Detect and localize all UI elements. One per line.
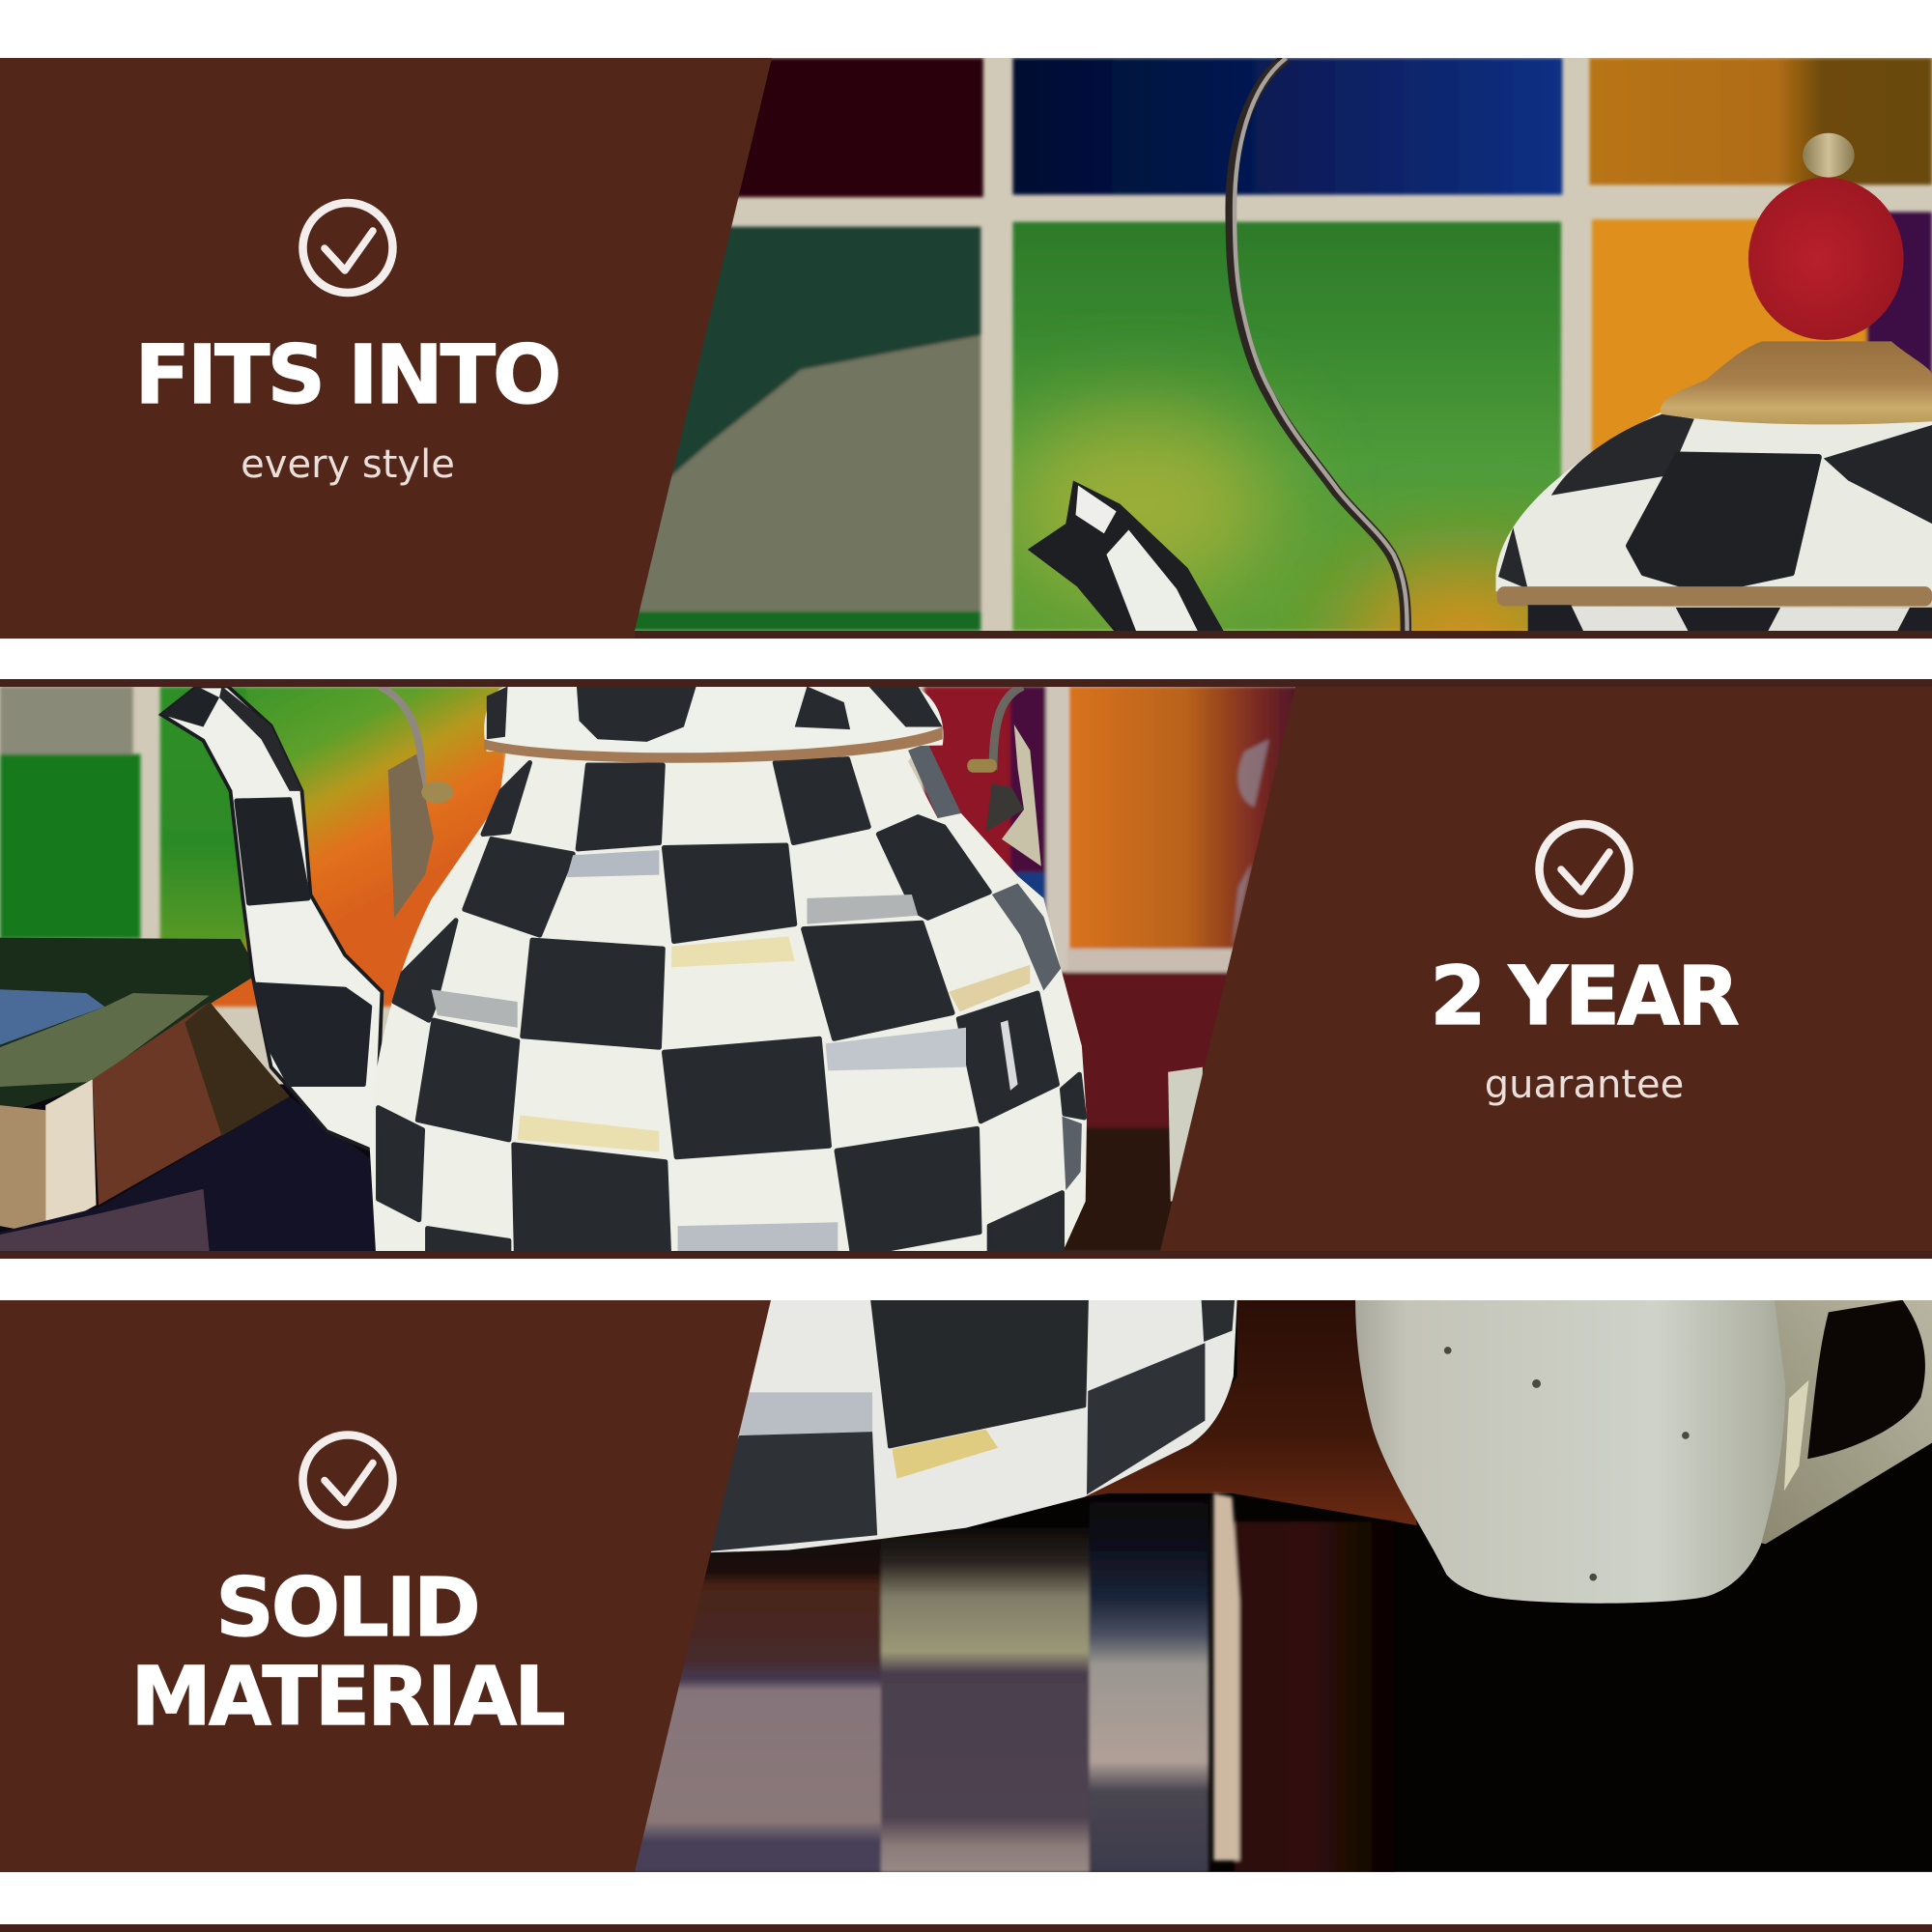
panel: solid material: [0, 1300, 1932, 1873]
subheading: every style: [241, 442, 455, 487]
small cup: [1168, 1067, 1203, 1202]
kettle base: [711, 1300, 1237, 1552]
green tile colour shifts: [1012, 356, 1528, 631]
heading: SOLID: [215, 1560, 478, 1655]
heading: 2 YEAR: [1430, 949, 1738, 1043]
photo: stained glass tiles with kettle lid: [635, 58, 1932, 631]
kettle spout: [161, 686, 382, 1152]
top and bottom strips: [0, 679, 1932, 1259]
panel: 2 year guarantee: [0, 679, 1932, 1259]
brown diagonal panel: [0, 679, 1932, 1259]
bottom strip: [635, 631, 1932, 639]
bottom strip: [0, 1924, 1932, 1932]
icon: check circle: [303, 1435, 392, 1524]
books: [0, 938, 394, 1253]
kettle lid and copper rim: [484, 686, 944, 763]
kettle handle: [1231, 58, 1407, 631]
kettle spout tip: [1028, 480, 1224, 631]
subheading: guarantee: [1485, 1063, 1684, 1107]
photo: kettle base and speckled mug on table: [616, 1300, 1932, 1873]
heading line two: MATERIAL: [130, 1649, 564, 1744]
kettle glaze streaks: [431, 850, 1030, 1253]
heading: FITS INTO: [135, 327, 558, 422]
kettle checkered body: [370, 739, 1087, 1256]
kettle grey shoulder cells: [908, 743, 1082, 1190]
lid finial, gold collar and checkered lid: [1495, 133, 1932, 631]
brown diagonal panel: [0, 1300, 771, 1872]
photo: checkered enamel kettle with books: [0, 686, 1303, 1256]
speckled mug: [1355, 1300, 1932, 1604]
icon: check circle: [1540, 824, 1629, 914]
icon: check circle: [303, 203, 392, 293]
panel: fits into every style: [0, 58, 1932, 639]
brown diagonal panel: [0, 58, 1932, 639]
kettle side handle hinges: [380, 686, 1041, 918]
